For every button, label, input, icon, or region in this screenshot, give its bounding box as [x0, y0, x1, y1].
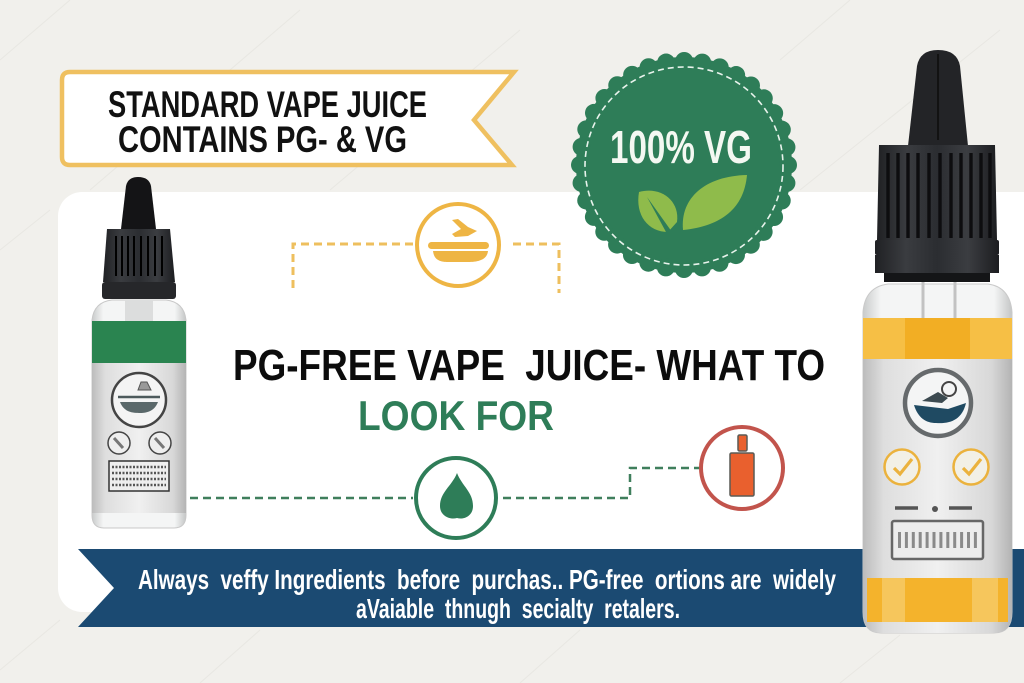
- emblem: left bottle bowl: [112, 373, 166, 427]
- emblem: right bottle boat: [905, 370, 971, 436]
- barcode: right bottle: [892, 521, 983, 559]
- barcode: left bottle: [109, 461, 169, 491]
- title: PG-FREE VAPE JUICE- WHAT TO: [233, 341, 825, 390]
- title: [233, 341, 825, 439]
- title: LOOK FOR: [358, 392, 554, 439]
- bottle: left green: [92, 177, 186, 528]
- icon: yellow bowl: [417, 204, 499, 286]
- marks: right bottle dashes: [895, 506, 972, 512]
- bottom connector: dashed green: [190, 468, 700, 498]
- icon: red bottle: [701, 427, 783, 509]
- badge: 100% VG: 100% VG: [610, 121, 752, 173]
- bottle: right yellow: [863, 50, 1012, 633]
- banner: standard vape juice: CONTAINS PG- & VG: [118, 119, 407, 160]
- icon: green drop: [416, 458, 496, 538]
- banner: standard vape juice: STANDARD VAPE JUICE: [108, 84, 427, 125]
- ribbon: bottom notice: aVaiable thnugh secialty retalers.: [356, 593, 680, 624]
- badge: 100% VG: [576, 57, 792, 273]
- icon: leaves: [638, 175, 747, 232]
- banner: standard vape juice: [62, 72, 514, 165]
- panel: white content card: [58, 192, 1024, 612]
- icons: left bottle small: [108, 432, 171, 454]
- top connector: dashed yellow: [293, 244, 559, 293]
- ribbon: bottom notice: [78, 549, 1024, 627]
- icon: checkmark right: [954, 450, 988, 484]
- icon: checkmark left: [884, 450, 920, 484]
